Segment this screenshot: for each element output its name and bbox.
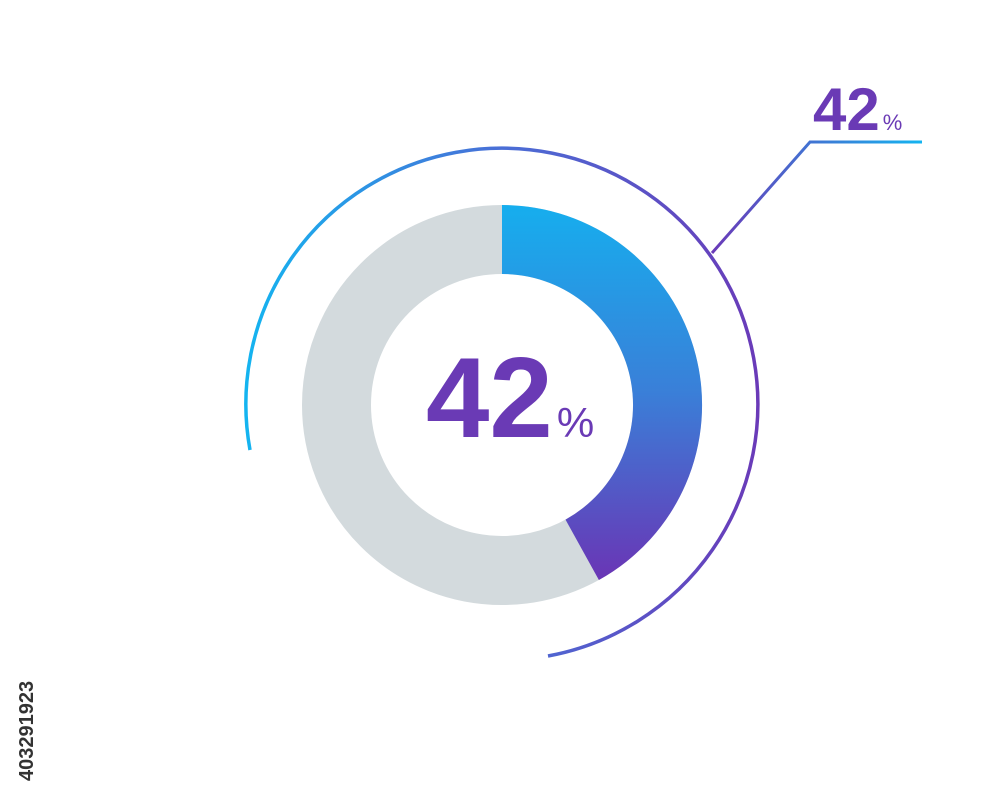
donut: colored 42% segment xyxy=(502,205,702,580)
outer arc xyxy=(246,148,758,656)
donut: grey remainder ring xyxy=(336,240,668,570)
watermark id: 403291923 xyxy=(16,681,38,781)
leader line xyxy=(712,142,922,253)
callout label: 42% xyxy=(813,76,902,143)
center label: 42% xyxy=(426,335,594,462)
